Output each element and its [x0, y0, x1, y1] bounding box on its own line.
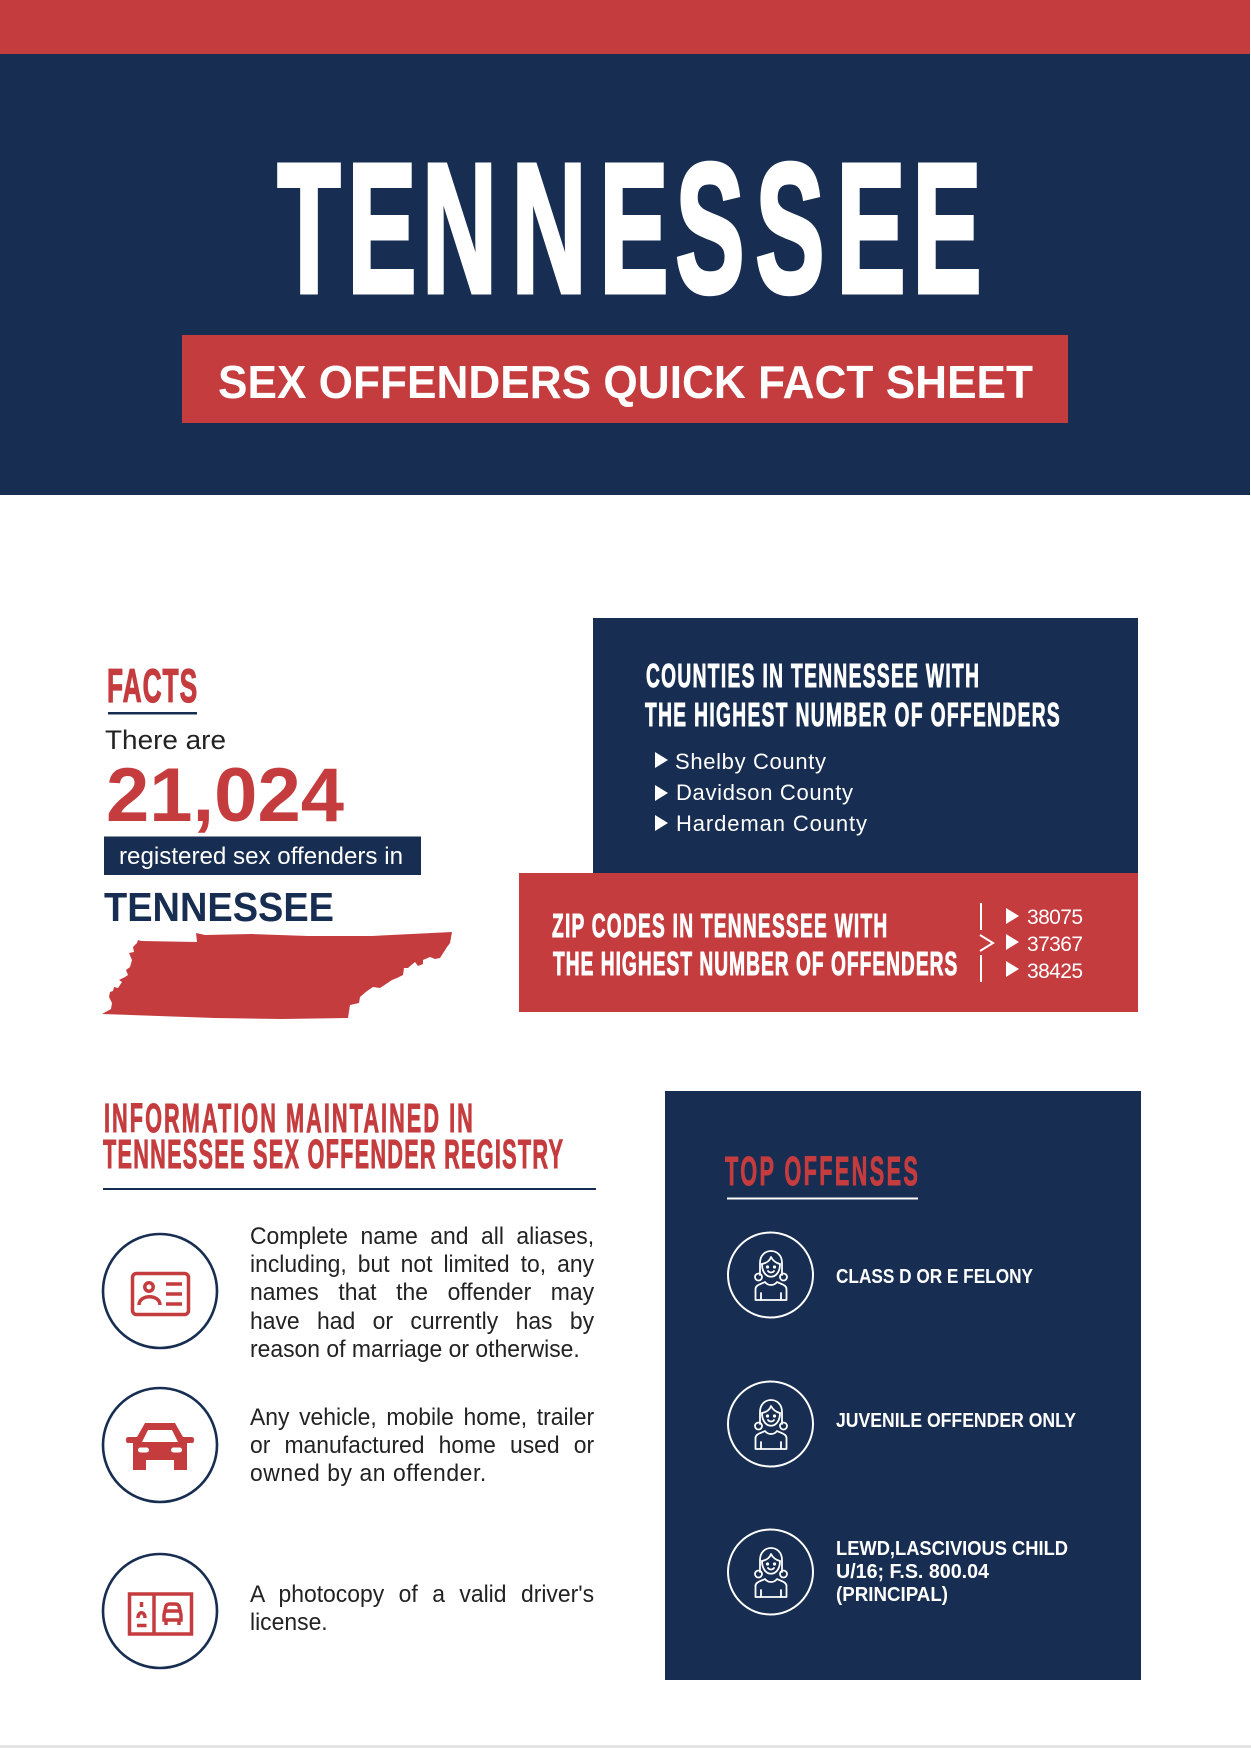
- text: vehicle information: Any vehicle, mobile home, trailer: [250, 1404, 594, 1431]
- counties heading: THE HIGHEST NUMBER OF OFFENDERS: [645, 697, 1060, 733]
- offense: juvenile offender only: JUVENILE OFFENDER ONLY: [836, 1409, 1076, 1432]
- facts heading: FACTS: [107, 661, 197, 713]
- offense: class d or e felony: CLASS D OR E FELONY: [836, 1265, 1033, 1288]
- offense: class d or e felony: [728, 1232, 1033, 1318]
- heading: information maintained: TENNESSEE SEX OFFENDER REGISTRY: [103, 1131, 563, 1177]
- subtitle text: SEX OFFENDERS QUICK FACT SHEET: [218, 356, 1033, 408]
- heading underline: [727, 1198, 918, 1200]
- counties list: [655, 749, 867, 836]
- title: TENNESSEE: [277, 125, 981, 331]
- offense: lewd lascivious child: LEWD,LASCIVIOUS CHILD: [836, 1537, 1068, 1560]
- zip code list: 38075: [1027, 906, 1083, 929]
- heading: information maintained: INFORMATION MAINTAINED IN: [104, 1095, 473, 1141]
- counties list: Shelby County: [675, 749, 826, 774]
- top red band: [0, 0, 1250, 54]
- text: vehicle information: [250, 1404, 594, 1487]
- text: vehicle information: or manufactured home used or: [250, 1432, 594, 1459]
- heading rule: [103, 1188, 596, 1190]
- header background: [0, 54, 1250, 495]
- text: name and aliases: reason of marriage or otherwise.: [250, 1336, 580, 1363]
- facts underline: [108, 712, 197, 714]
- offense: juvenile offender only: [728, 1382, 1076, 1466]
- text: name and aliases: Complete name and all aliases,: [250, 1223, 594, 1250]
- text: name and aliases: including, but not limited to, any: [250, 1251, 594, 1278]
- text: driver's license: license.: [250, 1609, 328, 1636]
- panel: zip codes: [519, 873, 1138, 1012]
- zip code list: 38425: [1027, 960, 1083, 983]
- registered banner: [104, 836, 421, 875]
- offense: lewd lascivious child: (PRINCIPAL): [836, 1583, 948, 1606]
- icon: driver's license: [103, 1554, 217, 1668]
- text: driver's license: [250, 1581, 594, 1636]
- text: driver's license: A photocopy of a valid driver's: [250, 1581, 594, 1608]
- zip codes heading: ZIP CODES IN TENNESSEE WITH: [552, 908, 887, 944]
- heading: information maintained: [103, 1095, 563, 1177]
- text: name and aliases: names that the offender may: [250, 1279, 594, 1306]
- text: name and aliases: [250, 1223, 594, 1363]
- counties heading: COUNTIES IN TENNESSEE WITH: [646, 658, 979, 694]
- counties heading: [645, 658, 1060, 733]
- tennessee map: [102, 932, 452, 1019]
- zip code list: 37367: [1027, 933, 1083, 956]
- counties list: Davidson County: [676, 780, 853, 805]
- panel: top offenses: [665, 1091, 1141, 1680]
- bracket divider: [980, 903, 993, 982]
- icon: id card: [103, 1234, 217, 1348]
- panel: counties: [593, 618, 1138, 874]
- offense: lewd lascivious child: [728, 1530, 1068, 1614]
- zip codes heading: [552, 908, 957, 982]
- counties list: Hardeman County: [676, 811, 867, 836]
- offense: lewd lascivious child: U/16; F.S. 800.04: [836, 1560, 990, 1583]
- bottom edge strip: [0, 1745, 1251, 1748]
- top offenses heading: TOP OFFENSES: [725, 1148, 918, 1194]
- registered banner: registered sex offenders in: [119, 843, 403, 870]
- text: name and aliases: have had or currently has by: [250, 1308, 594, 1335]
- panel: facts: [102, 661, 452, 1019]
- there are text: There are: [105, 725, 226, 755]
- subtitle banner: [182, 335, 1068, 423]
- text: vehicle information: owned by an offender.: [250, 1460, 487, 1487]
- offender count: 21,024: [106, 753, 344, 838]
- zip codes heading: THE HIGHEST NUMBER OF OFFENDERS: [553, 946, 957, 982]
- state name: TENNESSEE: [104, 884, 334, 930]
- zip code list: [1006, 906, 1083, 983]
- icon: car: [103, 1388, 217, 1502]
